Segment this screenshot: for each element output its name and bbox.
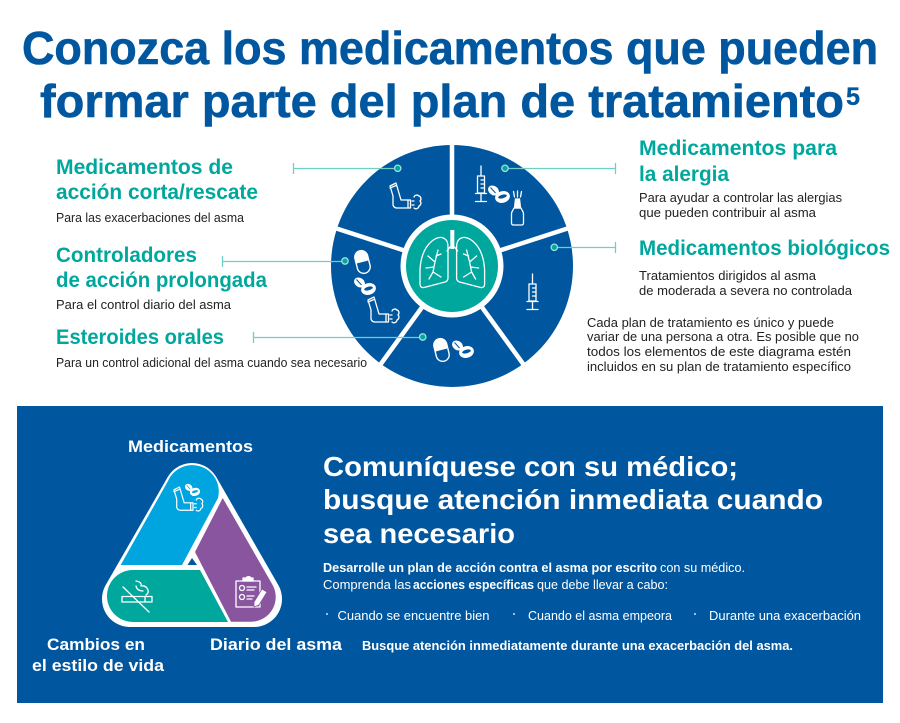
- label: allergy: Para ayudar a controlar las alergias: [639, 191, 842, 205]
- panel body text: Desarrolle un plan de acción contra el asma por escrito: [323, 561, 657, 575]
- label: allergy: la alergia: [639, 163, 729, 186]
- label: biologics: Tratamientos dirigidos al asma: [639, 269, 816, 283]
- label: controllers: de acción prolongada: [56, 269, 267, 292]
- panel heading: [323, 451, 823, 549]
- triangle labels: Medicamentos: [128, 438, 253, 456]
- action bullets: [326, 609, 861, 623]
- panel body text: acciones específicas: [413, 578, 534, 592]
- label: biologics: [639, 237, 890, 298]
- panel body text: Comprenda las: [323, 578, 411, 592]
- label: short-acting: Para las exacerbaciones del asma: [56, 211, 244, 225]
- label: short-acting: [56, 156, 258, 225]
- triangle labels: [32, 438, 343, 675]
- icon: no smoking: [122, 581, 152, 612]
- triangle diagram: [107, 465, 276, 622]
- medication wheel: [331, 143, 573, 387]
- label: allergy: Medicamentos para: [639, 137, 837, 160]
- icon: biologic syringe: [527, 274, 538, 310]
- icon: clipboard: [236, 577, 267, 607]
- urgent note: Busque atención inmediatamente durante una exacerbación del asma.: [362, 639, 793, 653]
- icon: lungs: [406, 220, 498, 312]
- icon: controller pills: [352, 275, 377, 297]
- action bullets: Cuando se encuentre bien: [338, 609, 490, 623]
- action bullets: Cuando el asma empeora: [528, 609, 672, 623]
- icon: controller capsule: [353, 249, 372, 275]
- label: allergy: [639, 137, 842, 220]
- panel heading: sea necesario: [323, 518, 515, 549]
- title: [22, 22, 878, 127]
- title: Conozca los medicamentos que pueden: [22, 22, 878, 74]
- note: todos los elementos de este diagrama estén: [587, 345, 851, 359]
- action bullets: Durante una exacerbación: [709, 609, 861, 623]
- icon: inhaler short-acting: [390, 183, 421, 209]
- icon: nasal spray: [512, 191, 524, 225]
- label: controllers: Controladores: [56, 244, 197, 267]
- triangle labels: Diario del asma: [210, 636, 343, 654]
- label: oral steroids: Para un control adicional del asma cuando sea necesario: [56, 356, 367, 370]
- label: controllers: [56, 244, 267, 312]
- panel body text: que debe llevar a cabo:: [537, 578, 668, 592]
- title: 5: [846, 83, 860, 111]
- icon: oral steroid capsule: [432, 337, 451, 363]
- label: short-acting: Medicamentos de: [56, 156, 233, 179]
- label: oral steroids: Esteroides orales: [56, 326, 224, 349]
- label: oral steroids: [56, 326, 367, 370]
- icon: controller inhaler: [368, 297, 399, 323]
- icon: allergy syringe: [476, 166, 486, 202]
- panel heading: Comuníquese con su médico;: [323, 451, 738, 482]
- note: variar de una persona a otra. Es posible que no: [587, 330, 859, 344]
- panel body text: [323, 561, 745, 592]
- label: short-acting: acción corta/rescate: [56, 181, 258, 204]
- triangle labels: el estilo de vida: [32, 657, 165, 675]
- panel heading: busque atención inmediata cuando: [323, 484, 823, 515]
- label: controllers: Para el control diario del asma: [56, 298, 231, 312]
- icon: oral steroid pills: [450, 338, 475, 360]
- icon: allergy pills: [486, 183, 511, 205]
- label: biologics: Medicamentos biológicos: [639, 237, 890, 260]
- triangle labels: Cambios en: [47, 636, 145, 654]
- note: incluidos en su plan de tratamiento específico: [587, 360, 851, 374]
- label: allergy: que pueden contribuir al asma: [639, 206, 816, 220]
- connector lines: [222, 163, 616, 343]
- panel: bottom: [17, 406, 883, 703]
- panel body text: con su médico.: [660, 561, 745, 575]
- note: Cada plan de tratamiento es único y puede: [587, 316, 834, 330]
- note: [587, 316, 859, 374]
- icon: inhaler and pills: [174, 482, 203, 511]
- title: formar parte del plan de tratamiento: [40, 75, 844, 127]
- label: biologics: de moderada a severa no controlada: [639, 284, 852, 298]
